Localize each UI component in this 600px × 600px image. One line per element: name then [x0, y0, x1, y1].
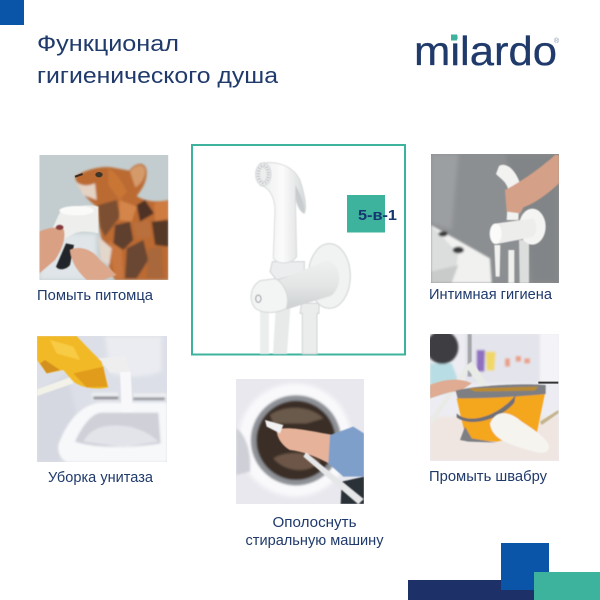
panel: product frame — [192, 145, 405, 354]
title: Функционал — [37, 31, 179, 56]
label: washing machine: Ополоснуть — [272, 515, 356, 531]
photo: washing machine — [236, 379, 364, 504]
photo: mop and bucket — [426, 331, 559, 461]
badge: 5-в-1: 5-в-1 — [358, 207, 397, 224]
panel: rinse washing machine — [236, 379, 384, 549]
corner square — [0, 0, 24, 25]
title: гигиенического душа — [37, 63, 279, 88]
panel: clean toilet — [37, 336, 167, 486]
photo: wet cat — [39, 155, 168, 280]
logo: milardo: ® — [554, 37, 560, 45]
decorative corner blocks — [408, 543, 600, 600]
label: pet: Помыть питомца — [37, 288, 154, 304]
label: intimate hygiene: Интимная гигиена — [429, 287, 553, 303]
photo: cleaning toilet — [37, 336, 167, 462]
panel: intimate hygiene — [429, 154, 559, 303]
label: washing machine — [246, 515, 384, 549]
logo: milardo: milardo — [414, 28, 557, 74]
title — [37, 31, 279, 88]
label: mop: Промыть швабру — [429, 469, 548, 485]
panel: wash a pet — [37, 155, 168, 304]
badge: 5-в-1 — [347, 195, 397, 232]
label: washing machine: стиральную машину — [246, 533, 384, 549]
photo: hand holding shower — [431, 154, 559, 283]
icon: white hygienic shower — [251, 163, 350, 354]
label: toilet: Уборка унитаза — [48, 470, 154, 486]
panel: wash a mop — [426, 331, 559, 485]
